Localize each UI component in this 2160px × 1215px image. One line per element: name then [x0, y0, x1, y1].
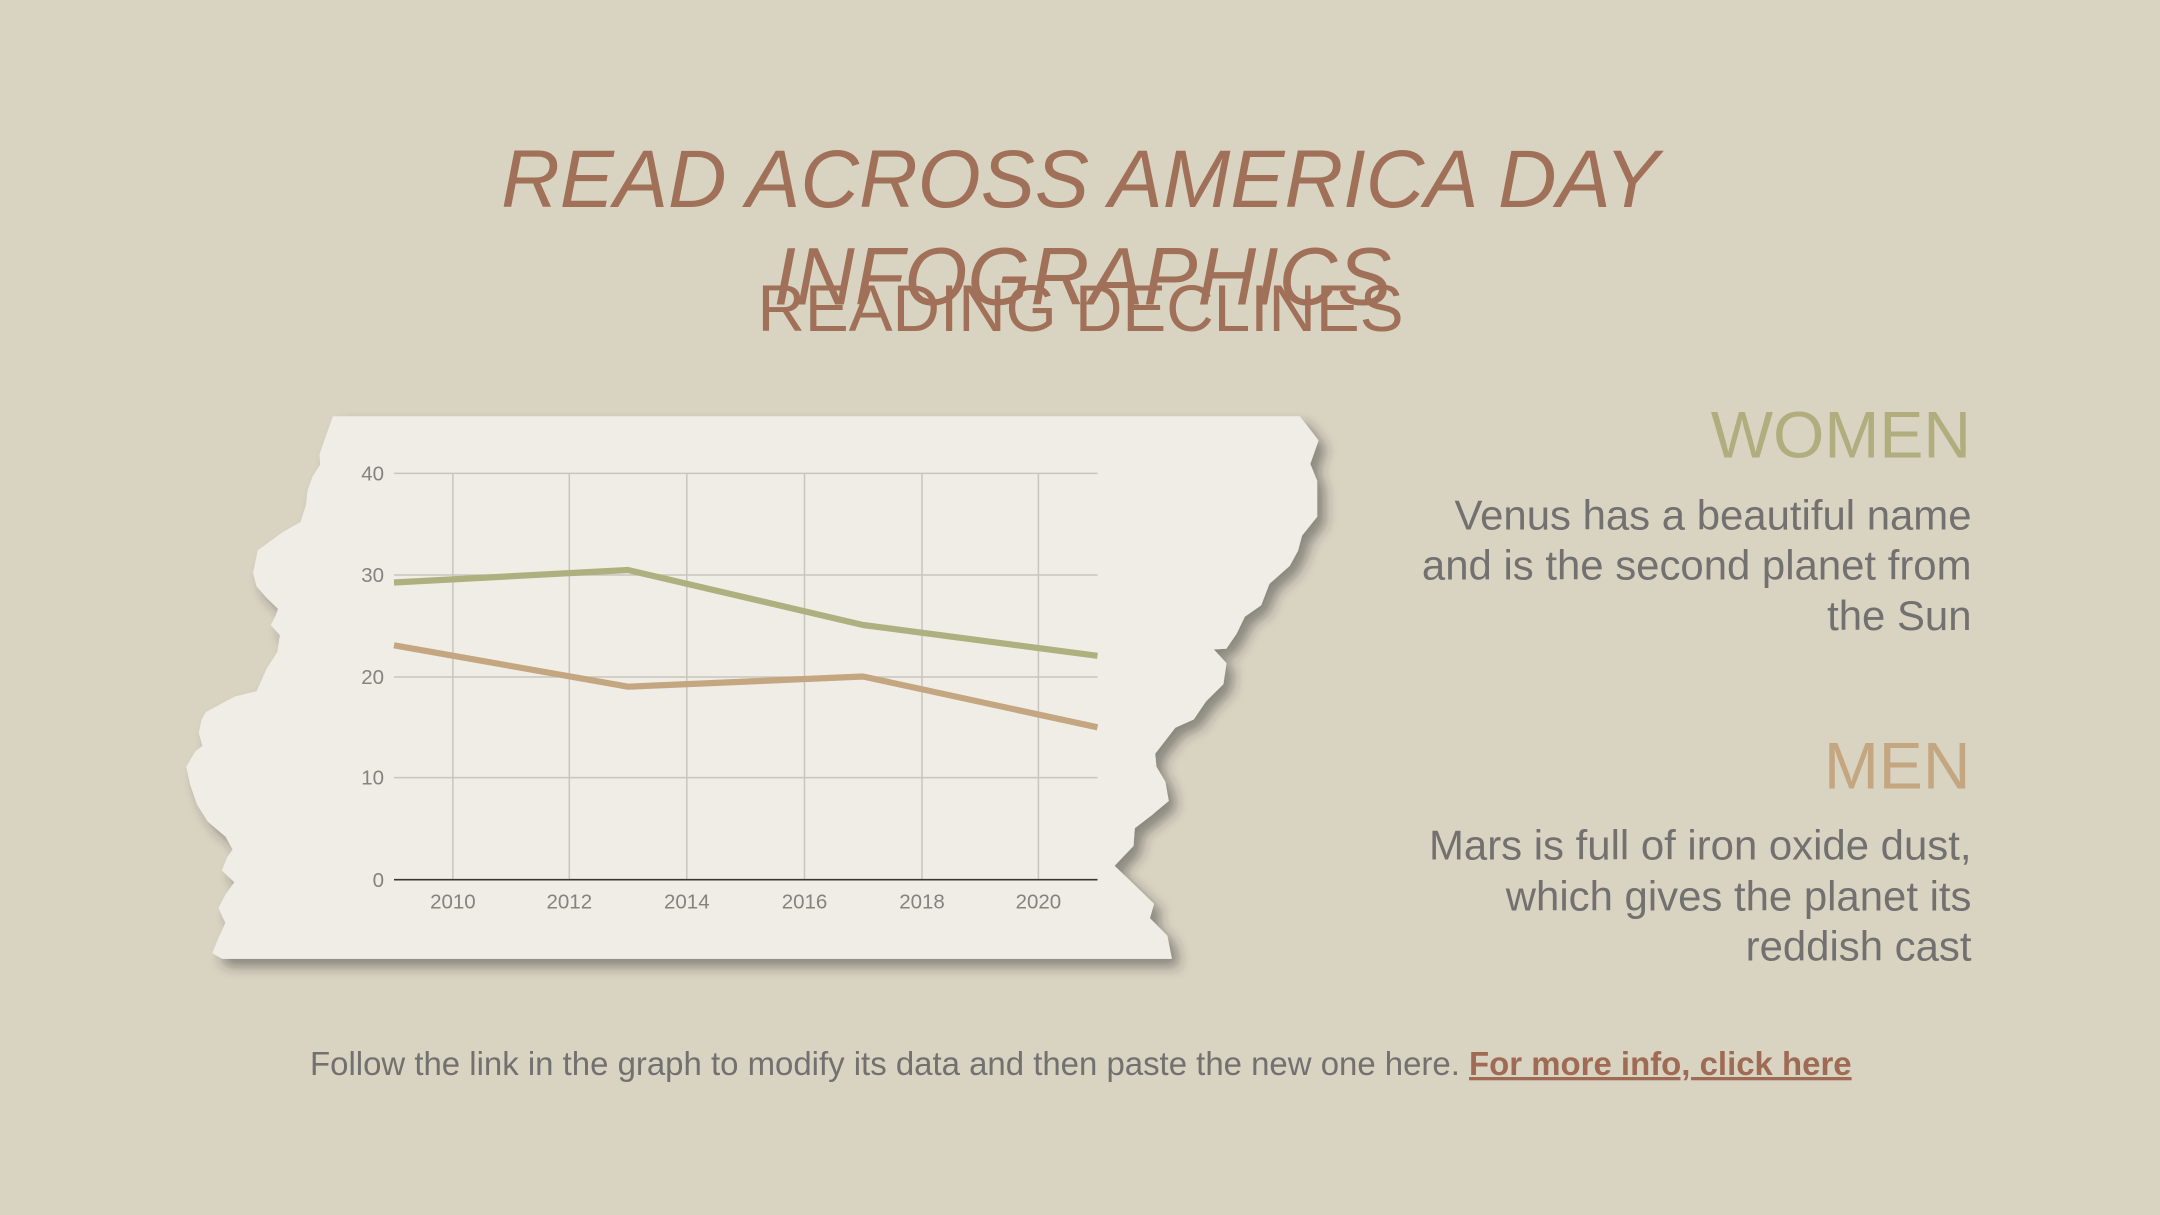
text block: men: which gives the planet its	[1505, 872, 1972, 920]
heading: men: MEN	[1824, 728, 1970, 802]
grid lines	[394, 473, 1098, 880]
title	[501, 135, 1665, 322]
y axis labels: 20	[361, 666, 384, 689]
x axis labels: 2012	[546, 890, 592, 914]
torn paper background	[187, 417, 1318, 958]
x axis labels: 2018	[899, 890, 945, 914]
series: men	[394, 645, 1098, 727]
text block: men: reddish cast	[1746, 922, 1972, 970]
chart: line chart	[361, 462, 1098, 914]
text block: women: and is the second planet from	[1422, 542, 1972, 588]
series: women	[394, 570, 1098, 656]
y axis labels: 0	[373, 869, 384, 892]
x axis labels: 2020	[1016, 890, 1061, 914]
heading: women: WOMEN	[1711, 398, 1971, 472]
y axis labels: 30	[361, 564, 384, 587]
y axis labels: 40	[361, 462, 384, 486]
title: READ ACROSS AMERICA DAY	[501, 135, 1665, 225]
x axis labels	[430, 890, 1061, 914]
text block: women: the Sun	[1827, 592, 1972, 639]
y axis labels	[361, 462, 384, 892]
subtitle: READING DECLINES	[757, 272, 1404, 345]
text block: men	[1429, 822, 1972, 970]
footer note: Follow the link in the graph to modify its data and then paste the new one here. For more info, click here	[310, 1045, 1852, 1082]
x axis labels: 2010	[430, 890, 476, 914]
y axis labels: 10	[361, 766, 384, 790]
x axis labels: 2014	[664, 890, 710, 914]
x axis labels: 2016	[782, 890, 827, 914]
text block: men: Mars is full of iron oxide dust,	[1429, 822, 1972, 868]
x axis	[394, 879, 1098, 881]
title: INFOGRAPHICS	[774, 232, 1391, 322]
panel: torn paper chart	[187, 417, 1318, 958]
text block: women	[1422, 492, 1972, 639]
text block: women: Venus has a beautiful name	[1454, 492, 1972, 538]
